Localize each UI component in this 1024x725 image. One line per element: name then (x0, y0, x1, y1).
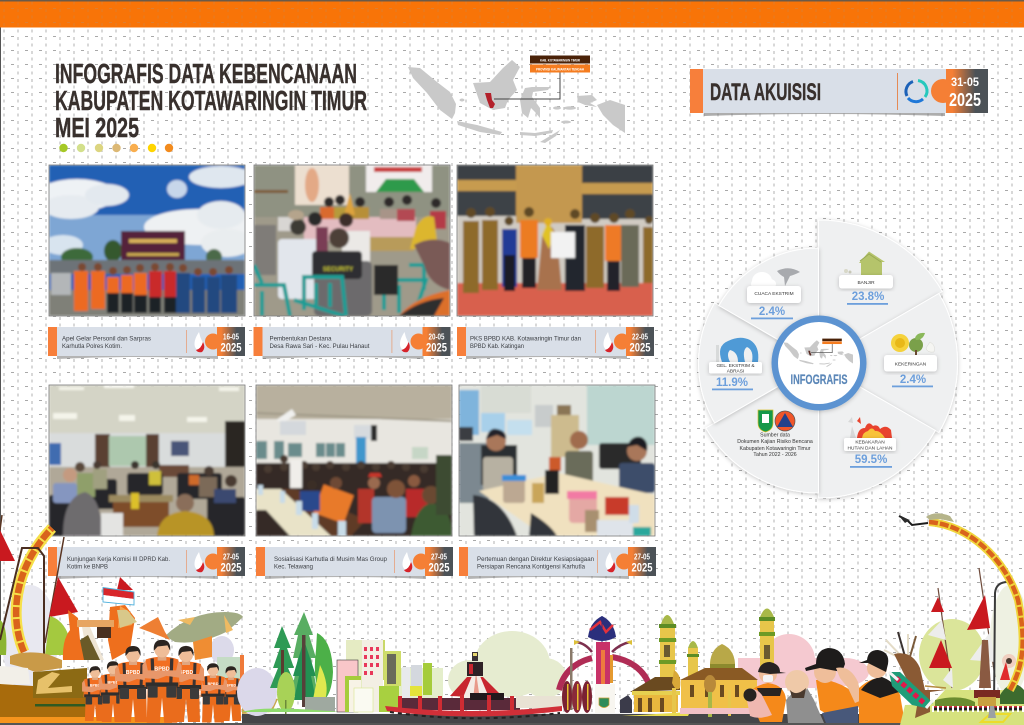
title: INFOGRAFIS DATA KEBENCANAAN (55, 58, 357, 89)
chart: disaster pie infographic (699, 220, 958, 498)
title: MEI 2025 (55, 112, 139, 143)
indonesia location map: PROVINSI KALIMANTAN TENGAH (536, 66, 584, 72)
caption: apel gelar 16-05: Apel Gelar Personil dan Sarpras (62, 336, 151, 342)
label: banjir (839, 275, 893, 305)
illustration: dayak dancer with shield (884, 632, 946, 718)
caption: pembentukan destana 20-05 (254, 327, 450, 359)
top orange band (0, 0, 1024, 28)
illustration: right arch with fish and hornbill (899, 513, 1023, 690)
photo: sosialisasi karhutla (256, 385, 452, 536)
center circle: INFOGRAFIS (790, 371, 848, 387)
icon: drought (891, 333, 934, 356)
illustration: bpbd rescue team: BPBD (226, 683, 236, 687)
illustration: grand mosque (622, 608, 869, 717)
panel: data akuisisi header: 2025 (949, 90, 981, 110)
caption: sosialisasi 27-05: 27-05 (431, 552, 447, 562)
caption: sosialisasi 27-05 (256, 547, 453, 579)
label: banjir: 23.8% (852, 291, 884, 303)
illustration: bottom left background and arch (0, 515, 1024, 725)
photo frames (49, 165, 655, 536)
label: gelombang (709, 362, 762, 390)
indonesia location map: KAB. KOTAWARINGIN TIMUR (540, 58, 580, 62)
icon: ring logo (906, 80, 927, 102)
photo: pertemuan direktur (459, 386, 655, 536)
photo: pks bpbd (457, 165, 653, 316)
caption: pertemuan 27-05: Persiapan Rencana Kontigensi Karhutla (477, 564, 586, 570)
label: gelombang: 11.9% (716, 377, 748, 389)
illustration: round red monument (385, 631, 567, 718)
photo: apel gelar personil (49, 165, 245, 316)
label: kebakaran: 59.5% (855, 454, 887, 466)
source note with logos: Sumber data (760, 432, 790, 438)
illustration: bpbd rescue team: BPBD (207, 681, 219, 686)
caption: pks bpbd 22-05: 2025 (630, 340, 651, 354)
source note with logos: Tahun 2022 - 2026 (753, 452, 797, 458)
title: KABUPATEN KOTAWARINGIN TIMUR (55, 85, 367, 116)
segment: kekeringan (818, 294, 958, 432)
panel: data akuisisi header: DATA AKUISISI (710, 79, 821, 106)
caption: pembentukan destana 20-05: 2025 (426, 340, 447, 354)
caption: pembentukan destana 20-05: Desa Rawa Sari - Kec. Pulau Hanaut (270, 343, 370, 350)
source note with logos (737, 410, 813, 458)
illustration: bpbd rescue team: BPBD (126, 670, 140, 676)
illustration: bpbd rescue team: BPBD (90, 683, 100, 687)
segment: kebakaran (818, 363, 935, 498)
label: gelombang: GEL. EKSTRIM & (716, 363, 755, 369)
photo: kunjungan kerja komisi (49, 386, 245, 536)
caption: pks bpbd 22-05: 22-05 (632, 332, 648, 342)
caption: apel gelar 16-05: Karhutla Polres Kotim. (62, 343, 122, 350)
label: cuaca (747, 286, 801, 319)
illustration: road (242, 696, 862, 723)
caption: pertemuan 27-05: 27-05 (634, 552, 650, 562)
caption: pks bpbd 22-05: PKS BPBD KAB. Kotawaringin Timur dan (470, 336, 582, 342)
illustration: right landscape and flags (900, 568, 1024, 725)
photo: pembentukan destana (254, 165, 450, 316)
fish statue (139, 612, 244, 697)
caption: sosialisasi 27-05: Sosialisasi Karhutla di Musim Mas Group (274, 556, 388, 563)
center circle (772, 316, 866, 410)
caption: pertemuan 27-05 (459, 547, 656, 579)
label: kekeringan: 2.4% (900, 374, 926, 386)
label: kebakaran: KEBAKARAN (855, 440, 885, 446)
illustration: bpbd rescue team: BPBD (107, 680, 119, 685)
illustration: bpbd rescue team: BPBD (154, 666, 170, 672)
illustration: trees (237, 612, 340, 716)
panel: data akuisisi header: 31-05 (951, 75, 979, 89)
icon: cloud and tornado (751, 268, 800, 290)
illustration: octopus monument (559, 616, 649, 713)
caption: sosialisasi 27-05: Kec. Telawang (274, 564, 314, 570)
label: kebakaran: HUTAN DAN LAHAN (848, 446, 893, 452)
icon: indonesian flag (103, 588, 134, 605)
illustration: bpbd rescue team (82, 640, 244, 723)
indonesia location map (408, 56, 625, 143)
icon: wave (716, 338, 758, 362)
title (55, 58, 367, 143)
caption: kunjungan kerja 27-05: Kotim ke BNPB (67, 564, 108, 570)
caption: pertemuan 27-05: Pertemuan dengan Direktur Kesiapsiagaan (477, 556, 595, 563)
caption: apel gelar 16-05 (48, 327, 245, 359)
segment: gelombang (699, 303, 818, 423)
caption: kunjungan kerja 27-05: Kunjungan Kerja Komisi III DPRD Kab. (67, 556, 170, 563)
caption: apel gelar 16-05: 16-05 (223, 332, 239, 342)
label: kekeringan (884, 355, 937, 387)
monument (63, 605, 137, 660)
decorative colored dots (59, 144, 173, 152)
caption: sosialisasi 27-05: 2025 (428, 560, 450, 574)
caption: pertemuan 27-05: 2025 (632, 560, 653, 574)
caption: apel gelar 16-05: 2025 (220, 340, 242, 354)
source note with logos: Kabupaten Kotawaringin Timur (740, 446, 811, 452)
caption: pembentukan destana 20-05: 20-05 (428, 332, 445, 342)
caption: kunjungan kerja 27-05: 27-05 (223, 552, 239, 562)
icon: fire (848, 417, 892, 438)
segment: sumber data (706, 363, 818, 493)
ground terrain (0, 652, 1024, 725)
illustration: rescuers carrying survivors (744, 648, 905, 723)
label: cuaca: CUACA EKSTRIM (754, 291, 794, 297)
photo: pembentukan destana: SECURITY (323, 267, 353, 273)
segment: banjir (818, 220, 942, 363)
caption: kunjungan kerja 27-05: 2025 (220, 560, 242, 574)
source note with logos: Dokumen Kajian Risiko Bencana (737, 439, 813, 445)
caption: pks bpbd 22-05: BPBD Kab. Katingan (470, 343, 525, 350)
caption: kunjungan kerja 27-05 (48, 547, 245, 579)
icon: house flood (844, 252, 885, 275)
label: banjir: BANJIR (857, 280, 875, 286)
label: gelombang: ABRASI (727, 368, 744, 374)
illustration: city buildings (337, 640, 443, 712)
panel: data akuisisi header (690, 69, 988, 116)
label: kekeringan: KEKERINGAN (895, 362, 927, 368)
caption: pks bpbd 22-05 (457, 327, 654, 359)
segment: cuaca (719, 248, 818, 363)
caption: pembentukan destana 20-05: Pembentukan Destana (270, 336, 332, 342)
label: kebakaran (844, 438, 896, 468)
illustration: bpbd rescue team: BPBD (179, 670, 193, 676)
label: cuaca: 2.4% (759, 306, 785, 318)
